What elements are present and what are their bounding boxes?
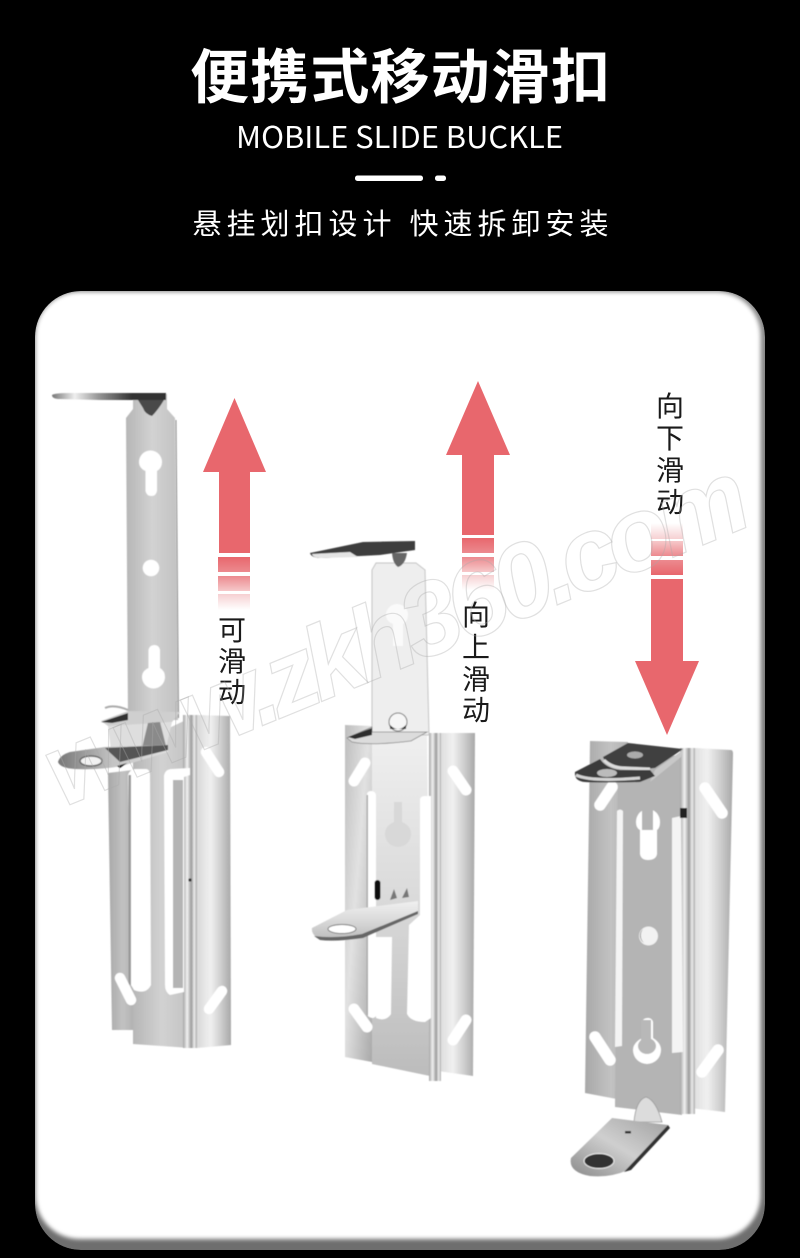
lower keyhole xyxy=(633,1018,661,1064)
upper sliding strip xyxy=(372,563,429,735)
label: 可滑动: 滑 xyxy=(218,646,246,677)
label: 向上滑动: 动 xyxy=(462,695,490,726)
watermark: www.zkh360.com xyxy=(27,437,766,829)
arrow 3: down xyxy=(635,523,699,735)
arrow 2: up xyxy=(446,381,510,590)
foot tab xyxy=(58,745,168,769)
middle hole xyxy=(639,926,658,946)
faint keyhole on strip xyxy=(386,604,408,646)
upper clamp xyxy=(101,711,180,726)
side rail xyxy=(183,715,197,1048)
label: 可滑动 xyxy=(218,615,246,708)
guide slots xyxy=(367,791,431,1022)
bracket 1: extended up xyxy=(52,393,231,1048)
label: 向下滑动: 向 xyxy=(656,391,684,422)
back plate left xyxy=(585,741,628,1100)
upper keyhole xyxy=(636,809,660,860)
divider dashes xyxy=(355,176,446,181)
center channel xyxy=(372,728,430,1076)
label: 向下滑动: 下 xyxy=(656,423,684,454)
tagline: 悬挂划扣设计 快速拆卸安装 xyxy=(192,208,608,241)
keyhole xyxy=(385,802,411,847)
bridge xyxy=(108,722,172,758)
side rail xyxy=(680,748,695,1114)
left guide slot xyxy=(128,769,151,992)
back plate left xyxy=(345,725,372,1062)
back plate left xyxy=(108,770,133,1030)
back plate right xyxy=(690,748,733,1112)
side rail xyxy=(429,733,441,1081)
pin xyxy=(374,880,380,900)
lower clamp xyxy=(347,727,427,744)
english subtitle: MOBILE SLIDE BUCKLE xyxy=(236,113,563,157)
top flange xyxy=(52,393,166,400)
label: 向上滑动 xyxy=(462,600,490,726)
top flange xyxy=(310,541,415,558)
clamp ball xyxy=(389,713,407,731)
top tab hole xyxy=(597,769,617,777)
top tab upper layer xyxy=(603,743,683,769)
diagonal slots xyxy=(120,752,222,1009)
hinge knob xyxy=(634,1097,662,1122)
label: 向上滑动: 上 xyxy=(462,632,490,663)
label: 向下滑动 xyxy=(656,391,684,518)
foot tab xyxy=(312,901,418,940)
right guide slot xyxy=(164,768,190,995)
knob xyxy=(138,400,164,416)
clamp details xyxy=(390,888,409,900)
label: 向下滑动: 滑 xyxy=(656,455,684,486)
top tab connector xyxy=(650,750,683,782)
label: 向下滑动: 动 xyxy=(656,487,684,518)
foot hole xyxy=(328,924,356,934)
title: 便携式移动滑扣 xyxy=(190,45,610,111)
upper sliding strip xyxy=(126,394,178,720)
top keyhole xyxy=(139,450,162,496)
top knob xyxy=(392,553,407,567)
bottom tab hole xyxy=(584,1154,614,1168)
foot hole xyxy=(80,756,102,766)
label: 可滑动: 可 xyxy=(218,615,246,646)
label: 可滑动: 动 xyxy=(218,677,246,708)
bottom tab xyxy=(571,1118,668,1176)
diagonal slots xyxy=(595,787,722,1072)
arrow 1: up xyxy=(203,398,266,610)
bracket 3: down position xyxy=(571,741,733,1176)
side guide strips xyxy=(615,810,683,1053)
center channel xyxy=(615,755,682,1115)
label: 向上滑动: 向 xyxy=(462,600,490,631)
middle hole xyxy=(143,560,159,576)
diagonal slots xyxy=(354,763,466,1040)
back plate right xyxy=(438,733,475,1076)
center channel xyxy=(133,720,190,1048)
top tab lower layer xyxy=(575,759,655,782)
bracket 2: mid position xyxy=(310,541,475,1081)
panel: white rounded card xyxy=(35,291,765,1250)
label: 向上滑动: 滑 xyxy=(462,664,490,695)
back plate right xyxy=(197,715,231,1048)
bottom keyhole xyxy=(142,645,165,688)
